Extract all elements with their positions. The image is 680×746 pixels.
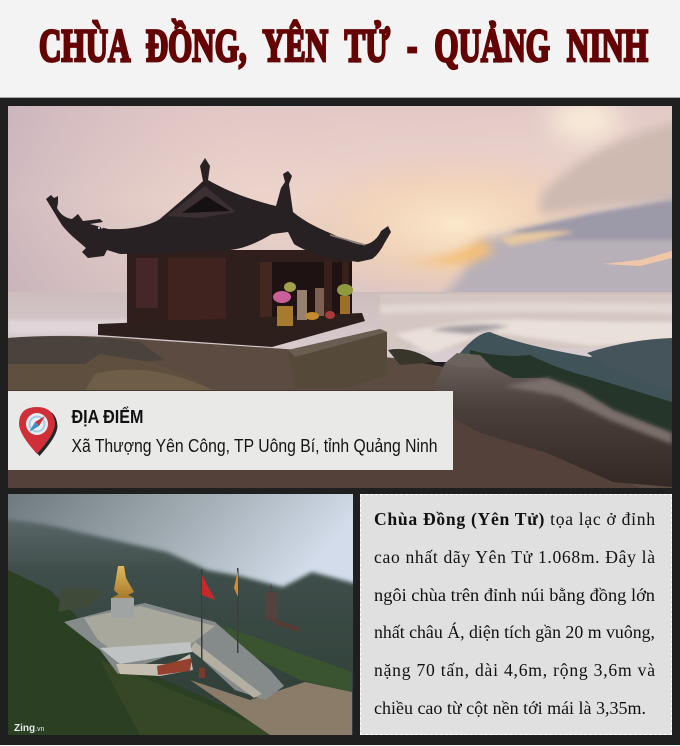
- text block: description: cao nhất dãy Yên Tử 1.068m. Đây là: [374, 547, 655, 567]
- panel: description text: [360, 494, 672, 735]
- text block: description: Chùa Đồng (Yên Tử) tọa lạc ở đỉnh: [374, 509, 655, 529]
- temple: [46, 158, 391, 347]
- temple roof: [46, 158, 391, 262]
- text block: description: ngôi chùa trên đỉnh núi bằng đồng lớn: [374, 585, 655, 605]
- temple hall: [127, 250, 352, 326]
- pagoda: [265, 583, 299, 632]
- callout text: [72, 406, 438, 456]
- temple base: [98, 313, 365, 347]
- terrace complex: [64, 603, 284, 700]
- text block: description: [374, 509, 655, 718]
- golden Buddha statue: [111, 566, 134, 618]
- distant mountains: [460, 332, 672, 440]
- misty sky: [8, 494, 353, 594]
- large foreground rock: [433, 353, 672, 487]
- text block: description: chiều cao từ cột nền tới mái là 3,35m.: [374, 698, 646, 718]
- bare ground: [190, 680, 352, 735]
- callout: location: [8, 391, 453, 470]
- panel: main temple photo: [8, 106, 672, 488]
- rocky ground: [8, 336, 672, 488]
- sea of clouds: [8, 292, 680, 362]
- stone altar: [288, 329, 387, 388]
- watermark: Zing.vn: [14, 723, 45, 734]
- sky: [8, 98, 680, 320]
- panel: aerial photo: [8, 494, 353, 735]
- flower offerings: [273, 282, 353, 326]
- text block: description: nhất châu Á, diện tích gần 20 m vuông,: [374, 622, 655, 642]
- callout text: ĐỊA ĐIỂM: [72, 406, 144, 427]
- misty mountains: [0, 518, 380, 746]
- flags: [199, 568, 238, 679]
- icon: map pin compass: [19, 407, 58, 456]
- green hillside: [8, 570, 352, 735]
- text block: description: nặng 70 tấn, dài 4,6m, rộng 3,6m và: [374, 660, 655, 680]
